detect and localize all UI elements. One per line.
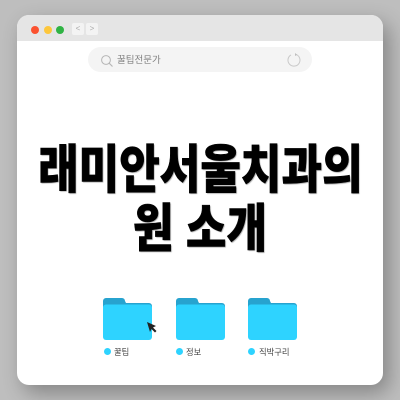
icon: folder	[103, 298, 152, 340]
label: 정보: 정보	[186, 346, 201, 358]
icon: reload	[288, 53, 300, 67]
title	[38, 128, 362, 262]
title bar	[17, 15, 383, 41]
folder: 정보	[176, 298, 225, 358]
folder: 꿀팁	[103, 298, 152, 358]
icon: forward button	[86, 23, 98, 35]
search text: 꿀팁전문가	[117, 52, 161, 66]
label: 정보	[176, 346, 201, 358]
search bar	[88, 47, 312, 72]
icon: red button	[31, 26, 39, 34]
icon: folder	[176, 298, 225, 340]
folder: 직박구리	[248, 298, 297, 358]
label: 직박구리: 직박구리	[259, 346, 290, 358]
icon: cursor arrow	[147, 322, 156, 332]
title: 원 소개	[133, 187, 267, 262]
label: 꿀팁	[104, 346, 129, 358]
title: 래미안서울치과의	[38, 128, 362, 203]
icon: yellow button	[44, 26, 52, 34]
icon: back button	[72, 23, 84, 35]
icon: forward button: >	[90, 24, 94, 33]
icon: green button	[56, 26, 64, 34]
icon: back button: <	[76, 24, 80, 33]
icon: folder	[248, 298, 297, 340]
icon: magnifier	[101, 55, 113, 67]
window controls	[31, 23, 98, 35]
label: 꿀팁: 꿀팁	[114, 346, 129, 358]
